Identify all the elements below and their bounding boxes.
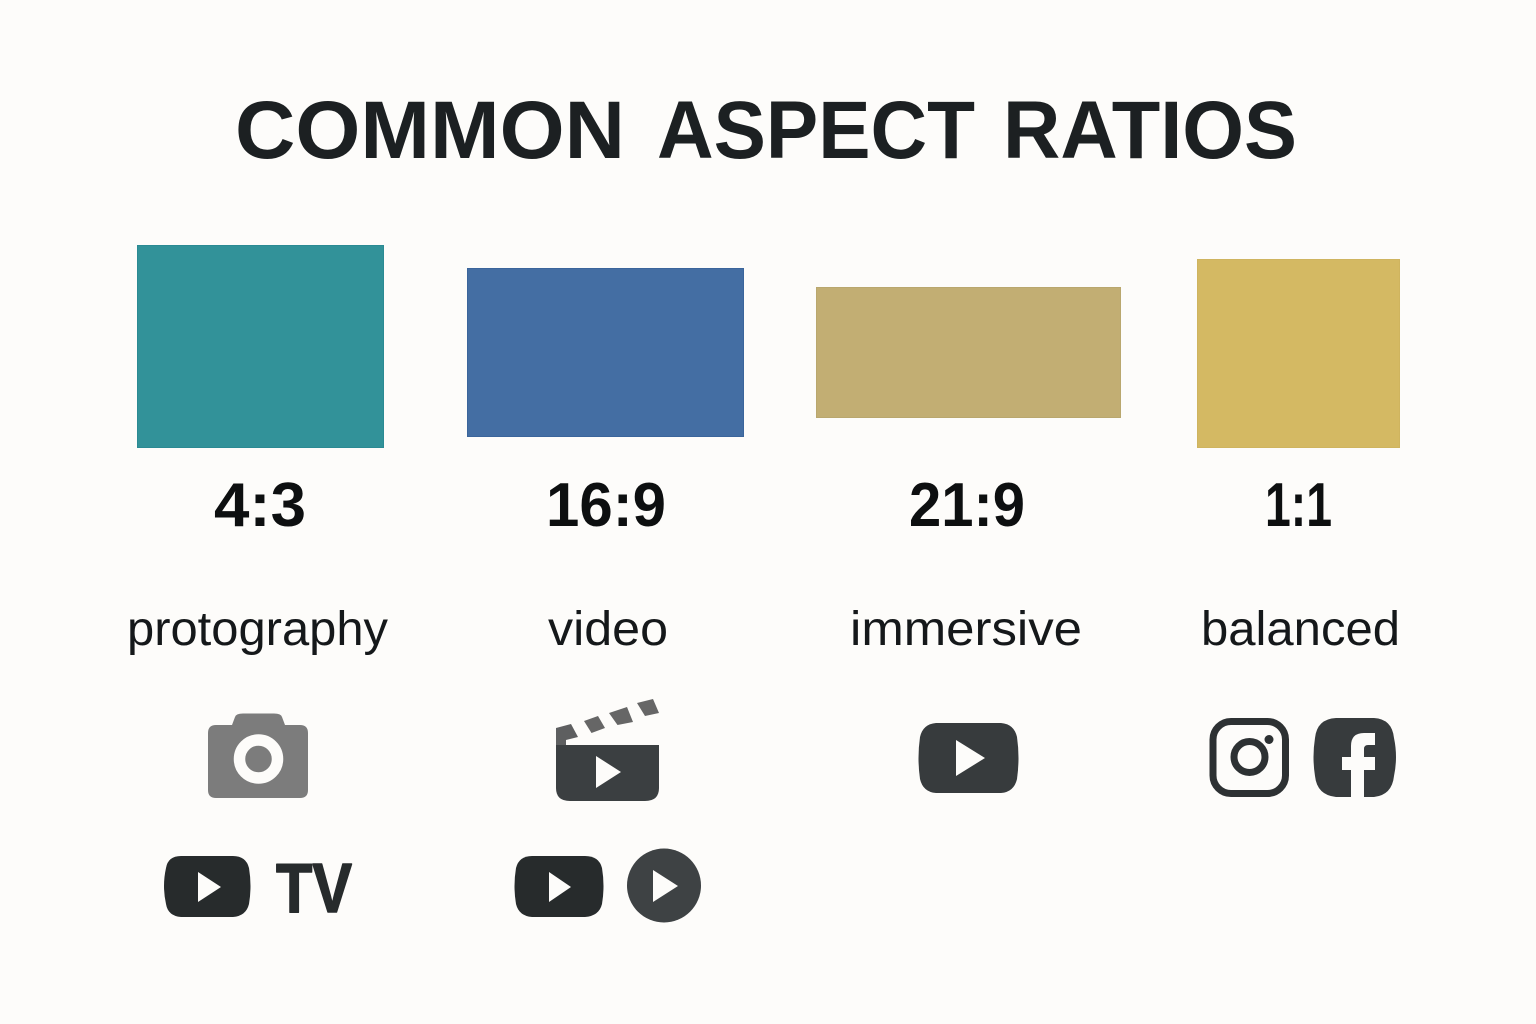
ratio swatch: 21:9 [816,288,1120,418]
icon: play button [164,856,250,917]
use label: protography: protography [127,603,388,656]
title: ASPECT [657,85,975,176]
icon: play button [918,723,1018,793]
ratio label: 4:3: 4:3 [214,471,306,540]
use label: video: video [548,603,668,656]
ratio swatch: 1:1 [1198,260,1400,448]
icon: play button [514,856,604,917]
panel: 1:1 [1198,260,1400,798]
use label: immersive: immersive [850,603,1082,656]
ratio swatch: 16:9 [468,268,744,436]
icon: TV text: TV [276,849,352,927]
title [235,85,1297,176]
icon: instagram [1213,722,1286,794]
icon: facebook [1314,718,1396,798]
panel: 4:3 [127,246,388,927]
ratio label: 1:1: 1:1 [1265,471,1332,540]
icon: camera [208,714,308,798]
use label: balanced: balanced [1201,603,1400,656]
ratio swatch: 4:3 [138,246,384,448]
panel: 16:9 [468,268,744,922]
panel: 21:9 [816,288,1120,793]
ratio label: 16:9: 16:9 [546,471,666,540]
icon: clapperboard [556,699,659,801]
ratio label: 21:9: 21:9 [909,471,1025,540]
title: COMMON [235,85,625,176]
title: RATIOS [1003,85,1297,176]
icon: round play button [627,848,701,922]
